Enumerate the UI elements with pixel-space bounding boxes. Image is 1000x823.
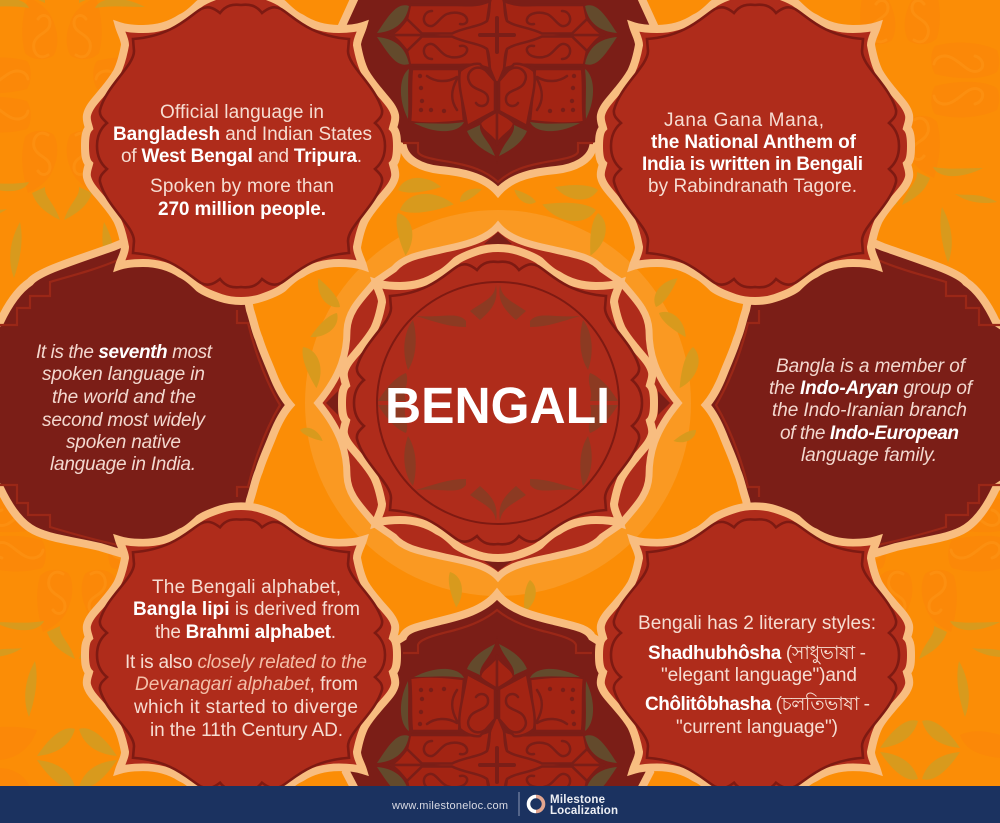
icon: logo ring bbox=[528, 796, 544, 812]
text: Indo-Aryan group: of the Indo-European bbox=[780, 423, 959, 444]
text: literary styles: "current language") bbox=[676, 717, 838, 738]
footer bbox=[0, 786, 1000, 823]
text: alphabet: Devanagari alphabet, from bbox=[135, 674, 358, 695]
text: literary styles: "elegant language")and bbox=[661, 665, 857, 686]
icon: top flower ornament bbox=[377, 0, 617, 164]
text: national anthem bbox=[642, 110, 863, 197]
text: Indo-Aryan group: Bangla is a member of bbox=[776, 356, 967, 377]
text: seventh most spoken: second most widely bbox=[42, 410, 206, 431]
text: alphabet: Bangla lipi is derived from bbox=[133, 599, 360, 620]
text: national anthem: Jana Gana Mana, bbox=[664, 110, 824, 131]
text: official language: Official language in bbox=[160, 102, 324, 123]
text: Indo-Aryan group bbox=[769, 356, 974, 466]
text: alphabet bbox=[125, 577, 367, 741]
panel: literary styles bbox=[599, 506, 911, 804]
text: Indo-Aryan group: language family. bbox=[801, 445, 937, 466]
logo wordmark: Milestone bbox=[550, 794, 605, 806]
text: official language: 270 million people. bbox=[158, 199, 326, 220]
text: Indo-Aryan group: the Indo-Iranian branch bbox=[772, 400, 967, 421]
text: literary styles: Shadhubhôsha (সাধুভাষা - bbox=[648, 643, 866, 664]
text: seventh most spoken: It is the seventh most bbox=[36, 342, 213, 363]
text: seventh most spoken: the world and the bbox=[52, 387, 196, 408]
text: alphabet: the Brahmi alphabet. bbox=[155, 622, 336, 643]
text: Indo-Aryan group: the Indo-Aryan group of bbox=[769, 378, 974, 399]
panel: official language bbox=[85, 0, 397, 301]
text: alphabet: The Bengali alphabet, bbox=[152, 577, 341, 598]
panel: alphabet bbox=[85, 506, 397, 804]
text: official language bbox=[113, 102, 372, 220]
panel: bottom ornamental arch bbox=[346, 594, 650, 811]
panel: seventh most spoken bbox=[0, 240, 290, 560]
icon: bottom flower ornament bbox=[377, 636, 617, 811]
logo wordmark: Localization bbox=[550, 805, 618, 817]
panel: Indo-Aryan group bbox=[706, 240, 1000, 560]
central outer lobes bbox=[318, 226, 678, 577]
panel: national anthem bbox=[599, 0, 911, 301]
text: seventh most spoken: spoken native bbox=[66, 432, 181, 453]
logo wordmark bbox=[550, 794, 618, 817]
text: official language: Bangladesh and Indian States bbox=[113, 124, 372, 145]
text: national anthem: the National Anthem of bbox=[651, 132, 857, 153]
text: seventh most spoken: language in India. bbox=[50, 454, 196, 475]
panel: central medallion bbox=[342, 248, 654, 558]
text: alphabet: which it started to diverge bbox=[133, 697, 358, 718]
text: literary styles: Chôlitôbhasha (চলতিভাষা - bbox=[645, 693, 870, 715]
text: official language: Spoken by more than bbox=[150, 176, 334, 197]
text: alphabet: It is also closely related to the bbox=[125, 652, 367, 673]
text: official language: of West Bengal and Tripura. bbox=[121, 146, 362, 167]
panel: top ornamental arch bbox=[340, 0, 656, 192]
text: seventh most spoken bbox=[36, 342, 213, 475]
text: alphabet: in the 11th Century AD. bbox=[150, 720, 343, 741]
text: national anthem: India is written in Bengali bbox=[642, 154, 863, 175]
footer website: www.milestoneloc.com bbox=[391, 800, 508, 812]
text: seventh most spoken: spoken language in bbox=[42, 364, 205, 385]
text: national anthem: by Rabindranath Tagore. bbox=[648, 176, 857, 197]
text: literary styles: Bengali has 2 literary styles: bbox=[638, 613, 876, 634]
text: literary styles bbox=[638, 613, 876, 738]
title: BENGALI bbox=[385, 377, 610, 434]
